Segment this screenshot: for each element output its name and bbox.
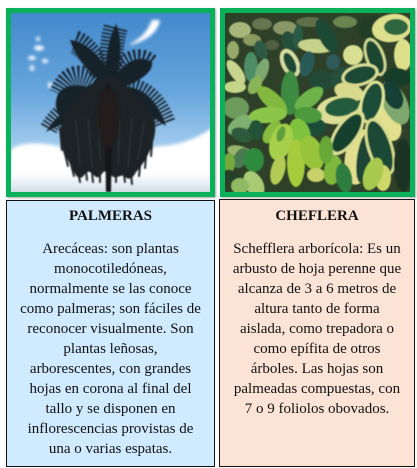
right cluster dark leaves	[374, 77, 416, 129]
photo: palm tree against the sky	[6, 8, 215, 197]
yellow-dark top right leaves	[370, 11, 414, 45]
text block: palmeras description: hojas en corona al final del	[29, 381, 192, 397]
text block: cheflera description: como epífita de otros	[253, 341, 381, 357]
panel: cheflera	[219, 199, 415, 467]
text block: palmeras description: plantas leñosas,	[63, 341, 158, 357]
text block: cheflera description: árboles. Las hojas son	[251, 361, 383, 377]
text block: cheflera description: alcanza de 3 a 6 metros de	[238, 281, 396, 297]
green lower centre	[322, 154, 344, 186]
text block: cheflera description: palmeadas compuestas, con	[234, 381, 400, 397]
heading: cheflera: CHEFLERA	[275, 208, 359, 224]
top middle cluster	[252, 39, 270, 61]
photo: variegated schefflera leaves	[220, 8, 415, 197]
panel: palmeras	[6, 200, 215, 467]
text block: palmeras description: Arecáceas: son plantas	[42, 241, 179, 257]
text block: cheflera description: 7 o 9 foliolos obovados.	[245, 401, 389, 417]
text block: cheflera description: altura tanto de forma	[254, 301, 380, 317]
text block: palmeras description: reconocer visualmente. Son	[27, 321, 194, 337]
text block: cheflera description: Schefflera arborícola: Es un	[233, 241, 401, 257]
text block: palmeras description	[20, 241, 201, 457]
light green central cluster	[298, 117, 326, 137]
lower left cluster	[229, 125, 255, 145]
text block: palmeras description: tallo y se disponen en	[46, 401, 175, 417]
heading: palmeras: PALMERAS	[69, 208, 152, 224]
text block: cheflera description: arbusto de hoja perenne que	[233, 261, 401, 277]
text block: palmeras description: monocotiledóneas,	[54, 261, 167, 277]
dark right edge	[394, 139, 412, 191]
text block: palmeras description: inflorescencias provistas de	[28, 421, 193, 437]
upper left cluster	[223, 57, 249, 87]
text block: palmeras description: una o varias espatas.	[49, 441, 172, 457]
text block: cheflera description: aislada, como trepadora o	[240, 321, 394, 337]
text block: cheflera description	[233, 241, 401, 417]
palm crown	[46, 24, 166, 192]
pale back leaves	[332, 79, 366, 105]
text block: palmeras description: como palmeras; son fáciles de	[20, 301, 201, 317]
text block: palmeras description: arborescentes, con grandes	[30, 361, 191, 377]
text block: palmeras description: normalmente se las conoce	[29, 281, 192, 297]
